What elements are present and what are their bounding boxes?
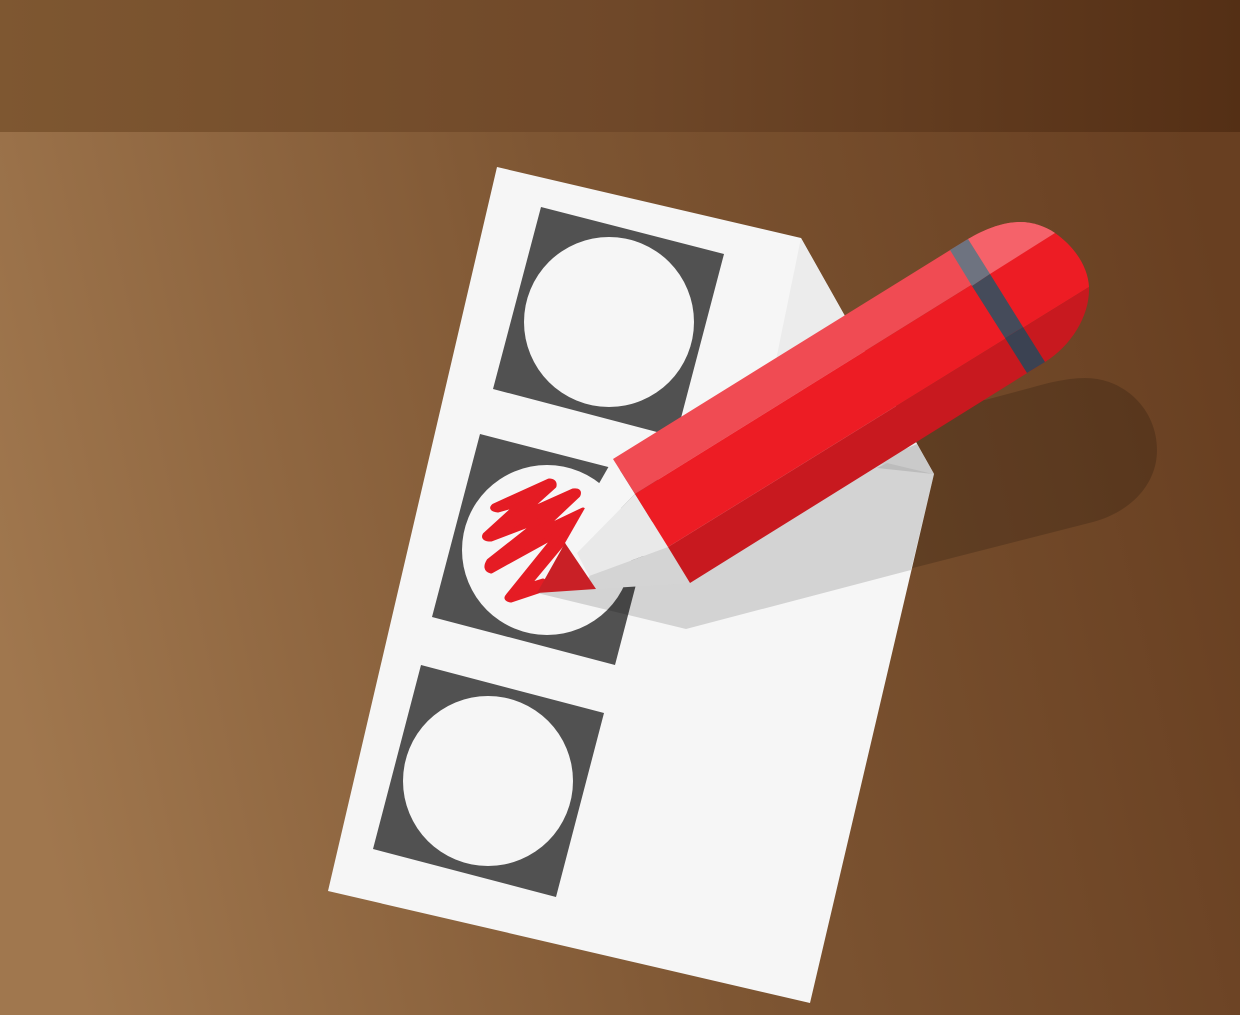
pencil shadow on paper <box>537 444 934 629</box>
pencil band <box>950 239 1045 373</box>
ballot box: middle <box>432 434 663 665</box>
ballot box: bottom <box>373 665 604 897</box>
paper sheet <box>328 167 934 1003</box>
red scribble mark <box>485 481 583 600</box>
pencil body: mid stripe <box>635 233 1089 547</box>
pencil wood tip: light face <box>565 459 635 553</box>
pencil wood tip: shaded face <box>589 547 690 589</box>
ballot box: top <box>493 207 724 437</box>
pencil shadow on table <box>890 378 1157 570</box>
pencil body: dark stripe <box>668 287 1089 583</box>
pencil lead <box>537 543 596 593</box>
ballot paper <box>328 167 934 1003</box>
pencil <box>537 222 1089 593</box>
pencil wood tip: middle face <box>577 494 668 576</box>
pencil body: light stripe <box>613 222 1055 494</box>
top dark band <box>0 0 1240 132</box>
pencil end lighter cap <box>968 222 1055 274</box>
paper fold flap <box>776 238 934 474</box>
paper crease under pencil <box>877 463 933 474</box>
